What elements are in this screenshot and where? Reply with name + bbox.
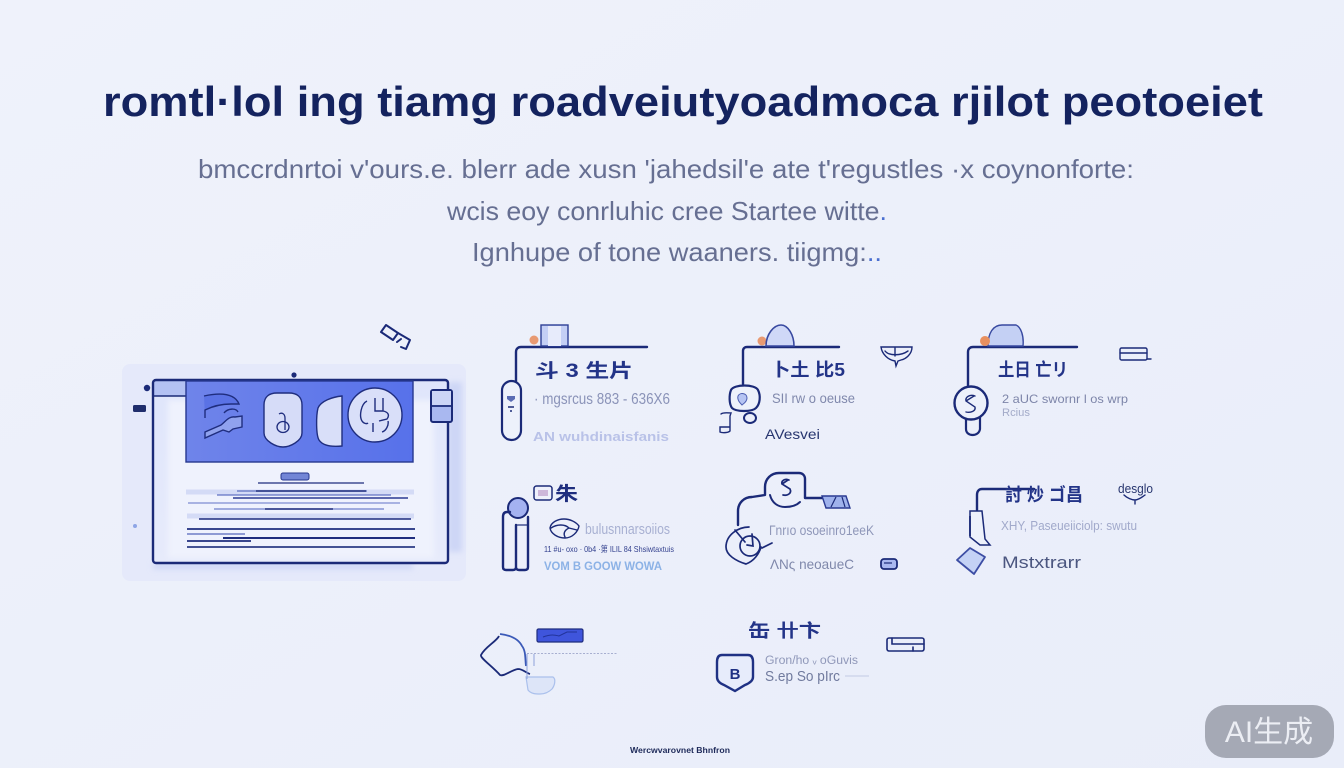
icon: tag with label: 朱 [555,483,578,505]
panel: item 1 [502,325,670,444]
item heading: 斗 3 生片 [535,360,633,382]
item text: SII rw o oeuse [772,390,855,406]
panel: item 7 [481,629,617,694]
icon: leaf label: desglo [1118,481,1153,496]
small button label [281,473,309,480]
item note: Mstxtrarr [1002,553,1081,572]
dotted line [527,652,617,654]
footer note: Wercwvarovnet Bhnfron [630,745,730,755]
item sub text: 11 #u- oxo · 0b4 ·第 ILIL 84 Shsiwtaxtuis [544,544,674,554]
icon: tray [822,496,850,508]
subtitle text block: Ignhupe of tone waaners. tiigmg: .. [472,237,882,267]
connector and pencil [957,489,1034,574]
title: romtl·lol ing tiamg roadveiutyoadmoca rjilot peotoeiet [103,78,1263,125]
side tab [431,390,452,422]
subtitle text block: wcis eoy conrluhic cree Startee witte . [446,196,887,226]
icon: tag with label [534,483,578,505]
subtitle text block [198,154,1134,267]
icon: floating tag [381,325,410,349]
soft shadow [153,382,462,569]
banner icon: lock capsule [264,393,302,447]
panel: item 5 [726,473,897,572]
label bar [537,629,583,642]
subtitle text block: bmccrdnrtoi v'ours.e. blerr ade xusn 'jahedsil'e ate t'regustles ·x coynonforte: [198,154,1134,184]
panel: main illustration [122,364,466,581]
item note: ΛΝς neoaueC [770,556,854,572]
panel: item 4 [503,483,674,573]
icon: dome [980,325,1023,346]
item heading: 卜土 比5 [771,360,845,380]
panel: item 8 [717,620,924,691]
item heading: 缶 卄卞 [748,620,821,641]
icon: shield badge: B [730,666,741,683]
item text: · mgsrcus 883 - 636X6 [534,391,670,408]
banner icon: half shield [317,396,342,446]
badge: AI generated: AI生成 [1225,716,1313,749]
connector and ring [954,347,1077,435]
icon: hand shape [481,634,555,694]
badge: AI generated [1205,705,1334,758]
panel: item 3 [954,325,1151,435]
icon: card [1120,348,1151,360]
item heading: 土日 亡リ [998,360,1068,380]
item text: Гnrıo osoeinro1eeK [769,522,875,538]
connector and capsule [502,347,647,440]
item text: bulusnnarsoiios [585,521,670,538]
item note: AN wuhdinaisfanis [533,429,669,444]
fading stroke [845,675,869,677]
item note: AVesvei [765,426,820,442]
connector and pin [720,347,839,433]
icon: dome [758,325,794,346]
icon: leaf label [1118,481,1153,504]
icon: card [887,638,924,651]
text lines [186,483,415,547]
decor dots [133,372,297,528]
item sub text: Rcius [1002,407,1030,419]
blue banner [186,381,413,462]
item heading: 討 炒 ゴ昌 [1005,484,1083,505]
item text: 2 aUC swornr l os wrp [1002,392,1128,406]
icon: shield badge [717,655,753,691]
connector and badge [738,473,823,525]
panel: item 2 [720,325,912,442]
item note: S.ep So pIrc [765,668,840,685]
icon: person [503,498,529,570]
banner icon: circle symbol [348,388,402,442]
window frame [153,380,448,563]
item text: Gron/ho ᵥ oGuvis [765,655,858,667]
panel: item 6 [957,481,1153,574]
item note: VOM B GOOW WOWA [544,561,662,573]
icon: bowl [881,347,912,366]
banner icon: arrows [204,394,242,438]
item text: XHY, Paseueiiciolp: swutu [1001,519,1137,533]
icon: door [530,325,568,346]
icon: globe [550,519,579,538]
icon: small tag [881,559,897,569]
icon: radial target [726,527,772,564]
